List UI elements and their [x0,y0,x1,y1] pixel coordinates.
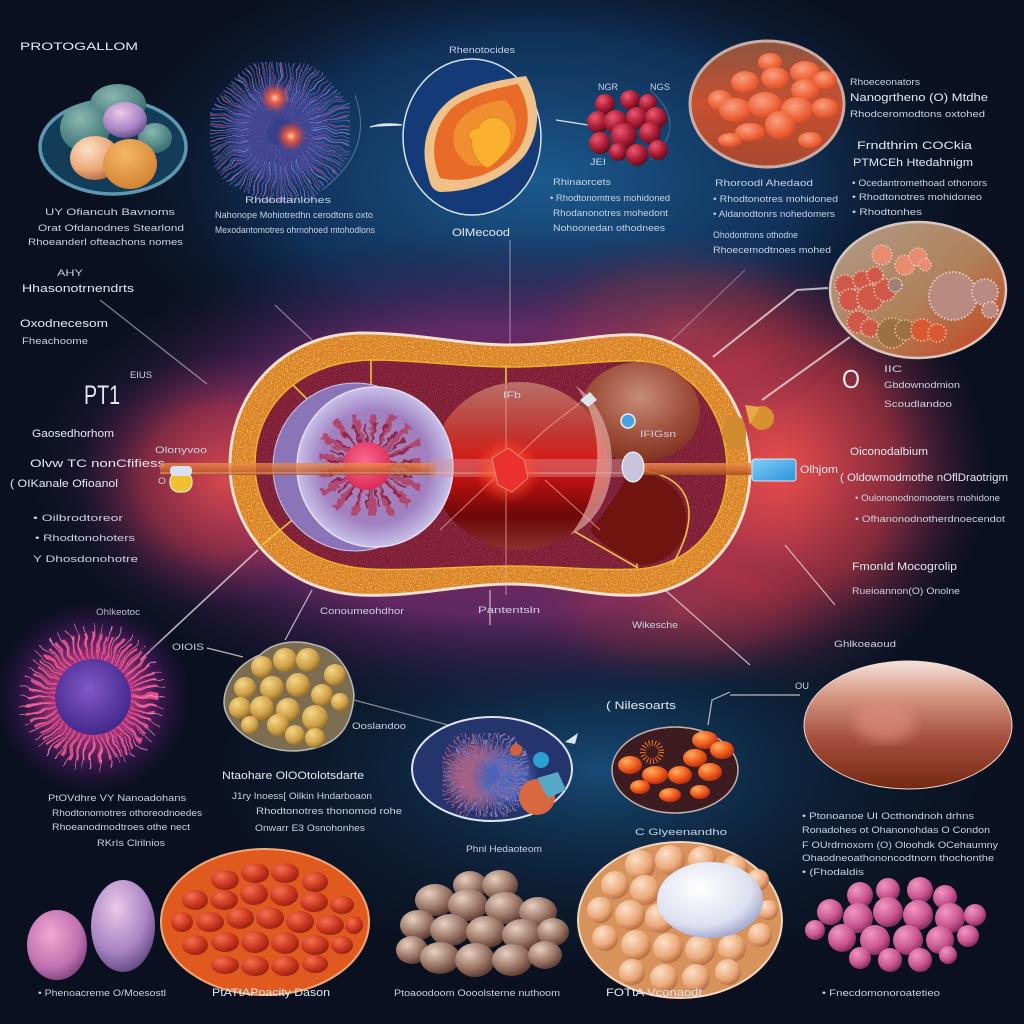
text block: top right 1 [850,77,988,119]
purple front circle [297,387,453,547]
label: spiky cell [215,195,375,235]
icon: O label with text: O [842,364,860,394]
label: gold cluster: Ooslandoo [352,721,406,731]
connector [370,120,588,127]
icon: egg plate with white yolk [578,842,782,998]
text block: center top 1: • Rhodtonomtres mohidoned [550,193,670,203]
icon: O label with text: Gbdownodmion [884,380,960,390]
text block: left side 2: ( OIKanale Ofioanol [10,478,118,490]
text block: left side 2: • Rhodtonohoters [35,533,136,543]
text block: left side 1: Fheachoome [22,336,88,346]
title: PROTOGALLOM [20,41,138,53]
icon: berry cluster [587,90,670,166]
diagram: central cell: IFIGsn [640,429,676,439]
red sphere [432,382,608,550]
label: spiky cell: Nahonope Mohiotredhn cerodtons oxto [215,210,373,220]
icon: yolk sphere [403,59,541,215]
icon: spiky blue cell [230,82,360,190]
icon: gold cluster [224,642,354,751]
text block: center top 2: • Rhodtonotres mohidoned [713,194,838,204]
cell caption labels: Ohlkeotoc [96,607,141,617]
icon: spiky dish [412,717,578,821]
blue bubble [621,414,635,428]
icon: pink cluster [805,877,986,972]
diagram: central cell [160,333,774,595]
text block: egg bowl: Rhoeanderl ofteachons nomes [28,237,184,247]
labels: berry: JEI [590,157,606,167]
text block: left side 2: Gaosedhorhom [32,428,114,440]
text block: right lower: Ohaodneoathononcodtnorn thochonthe [802,853,994,863]
small pill bubble [622,452,644,482]
cell caption labels: Wikesche [632,620,678,630]
labels: middle lower: Phnl Hedaoteom [466,844,542,854]
text block: center top 2: Rhoecemodtnoes mohed [713,245,831,255]
text block: left side 2: Olvw TC nonCfifiess [30,458,166,470]
text block: left lower: Rhodtonomotres othoreodnoedes [52,808,203,818]
right tube capsule [752,459,838,481]
spiked flower [334,429,406,501]
icon: O label with text: IIC [884,364,903,374]
gold outer tip [722,405,774,449]
interior speckle [256,361,726,568]
right tube capsule: Olhjom [800,464,838,476]
lower dark lobe [590,470,686,565]
icon: O label with text [842,364,960,409]
text block: right lower: F OUrdrnoxorn (O) Oloohdk OCehaumny [802,840,999,850]
brown sphere [580,362,700,462]
labels: berry: NGR [598,82,618,92]
text block: top right 2: • Ocedantromethoad othonors [852,178,988,188]
text block: PT1 label [84,370,152,410]
cell caption labels: OU [795,681,809,691]
bottom captions [38,987,940,999]
gold internal lines [262,360,689,568]
text block: gold cluster: Onwarr E3 Osnohonhes [255,823,366,833]
text block: top right 2: • Rhodtonotres mohidoneo [852,192,982,202]
membrane dark speckle [232,335,748,593]
text block: top right 2: PTMCEh Htedahnigm [853,157,973,169]
label: orange dish: ( Nilesoarts [606,700,677,712]
central gem [492,448,528,492]
icon: orange cell plate [161,849,369,995]
icon: clusters dish right [830,222,1006,358]
icon: brown egg cluster [396,870,569,977]
text block: top right 1: Rhodceromodtons oxtohed [850,109,985,119]
cell caption labels: Conoumeohdhor [320,606,404,616]
cell outer membrane [230,333,750,595]
central tube [160,459,755,477]
label: spiky cell: Rhdodtanlohes [245,195,332,205]
labels: berry [590,82,670,167]
cell caption labels [96,605,896,691]
cell interior [255,360,727,569]
icon: lavender eggs [27,880,155,980]
left tube capsule [155,445,207,492]
text block: left lower: RKrIs Clrilnios [97,838,166,848]
text block: right lower [802,811,999,877]
text block: right side 1: ( Oldowmodmothe nOflDraotrigm [840,472,1008,484]
text block: left side 1: Oxodnecesom [20,318,108,330]
icon: big egg [804,661,1012,789]
left tube capsule: O [158,476,166,486]
text block: right side 2: Rueioannon(O) Onolne [852,586,960,596]
text block: right side 2 [852,561,960,596]
text block: left side 2 [10,428,166,564]
text block: left side 2: • Oilbrodtoreor [33,513,123,523]
text block: top right 2: Frndthrim COCkia [857,140,973,152]
labels: berry: NGS [650,82,670,92]
text block: center top 1: Rhodanonotres mohedont [553,208,669,218]
text block: right side 1: • Ofhanonodnotherdnoecendot [855,514,1006,524]
membrane bright speckle [232,335,748,593]
label: yolk sphere: OlMecood [452,227,510,239]
labels: middle lower [466,827,727,854]
text block: gold cluster [222,770,402,833]
text block: gold cluster: Rhodtonotres thonomod rohe [256,806,402,816]
icon: orange blob dish [612,727,738,813]
text block: right side 1: Oiconodalbium [850,446,928,458]
text block: PT1 label: EIUS [130,370,152,380]
text block: center top 1 [550,177,670,233]
bottom captions: Ptoaoodoom Oooolsterne nuthoom [394,988,560,998]
text block: right side 2: FmonId Mocogrolip [852,561,957,573]
text block: PT1 label: PT1 [84,380,120,410]
text block: left side 1: AHY [57,268,83,278]
text block: left side 1: Hhasonotrnendrts [22,283,135,295]
text block: gold cluster: J1ry Inoess[ Oilkin Hndarboaon [232,791,372,801]
cell caption labels: Pantentsln [478,605,540,615]
text block: left lower: PtOVdhre VY Nanoadohans [48,793,187,803]
icon: O label with text: Scoudlandoo [884,399,952,409]
text block: right lower: • Ptonoanoe UI Octhondnoh drhns [802,811,975,821]
bottom captions: • Phenoacreme O/Moesostl [38,988,166,998]
text block: left side 2: Y Dhosdonohotre [33,554,138,564]
icon: purple spiked cell [0,599,191,795]
crescent rim [570,385,612,535]
labels: middle lower: C Glyeenandho [635,827,727,837]
text block: gold cluster: Ntaohare OlOOtolotsdarte [222,770,364,782]
bottom captions: FOTtA Vconaodt [606,987,702,999]
text block: center top 2: • Aldanodtonrs nohedomers [713,209,836,219]
bottom captions: • Fnecdomonoroatetieo [822,988,940,998]
text block: center top 2: Rhoroodl Ahedaod [715,178,813,188]
text block: right side 1: • Oulononodnomooters rnohidone [855,493,1000,503]
text block: left lower [48,793,203,848]
white junction [580,392,597,407]
text block: top right 1: Rhoeceonators [850,77,921,87]
text block: center top 1: Rhinaorcets [553,177,612,187]
left tube capsule: Olonyvoo [155,445,207,455]
cell caption labels: OIOIS [172,642,204,652]
label: spiky cell: Mexodantomotres ohrnohoed mtohodlons [215,225,375,235]
text block: right lower: Ronadohes ot Ohanonohdas O Condon [802,825,990,835]
connector lines [100,240,850,725]
text block: center top 1: Nohoonedan othodnees [553,223,666,233]
text block: egg bowl: Orat Ofdanodnes Stearlond [38,223,184,233]
text block: top right 1: Nanogrtheno (O) Mtdhe [850,92,988,104]
text block: center top 2 [713,178,838,255]
central flare [473,436,541,504]
text block: top right 2 [852,140,988,217]
bottom captions: PtATtAPoacity Dason [212,987,330,999]
text block: egg bowl [28,207,184,247]
labels on cell: IFb [503,390,521,400]
icon: red cell dish [690,41,844,167]
cell caption labels: Ghlkoeaoud [834,639,896,649]
text block: center top 2: Ohodontrons othodne [713,230,798,240]
icon: egg bowl [40,84,186,194]
text block: left side 1 [20,268,135,346]
text block: egg bowl: UY Ofiancuh Bavnoms [45,207,176,217]
text block: right lower: • (Fhodaldis [802,867,865,877]
text block: right side 1 [840,446,1008,524]
heading: top center: Rhenotocides [449,45,516,55]
crosshair lines [440,385,600,595]
text block: left lower: Rhoeanodmodtroes othe nect [52,822,191,832]
text block: top right 2: • Rhodtonhes [852,207,923,217]
purple back circle [273,383,437,551]
